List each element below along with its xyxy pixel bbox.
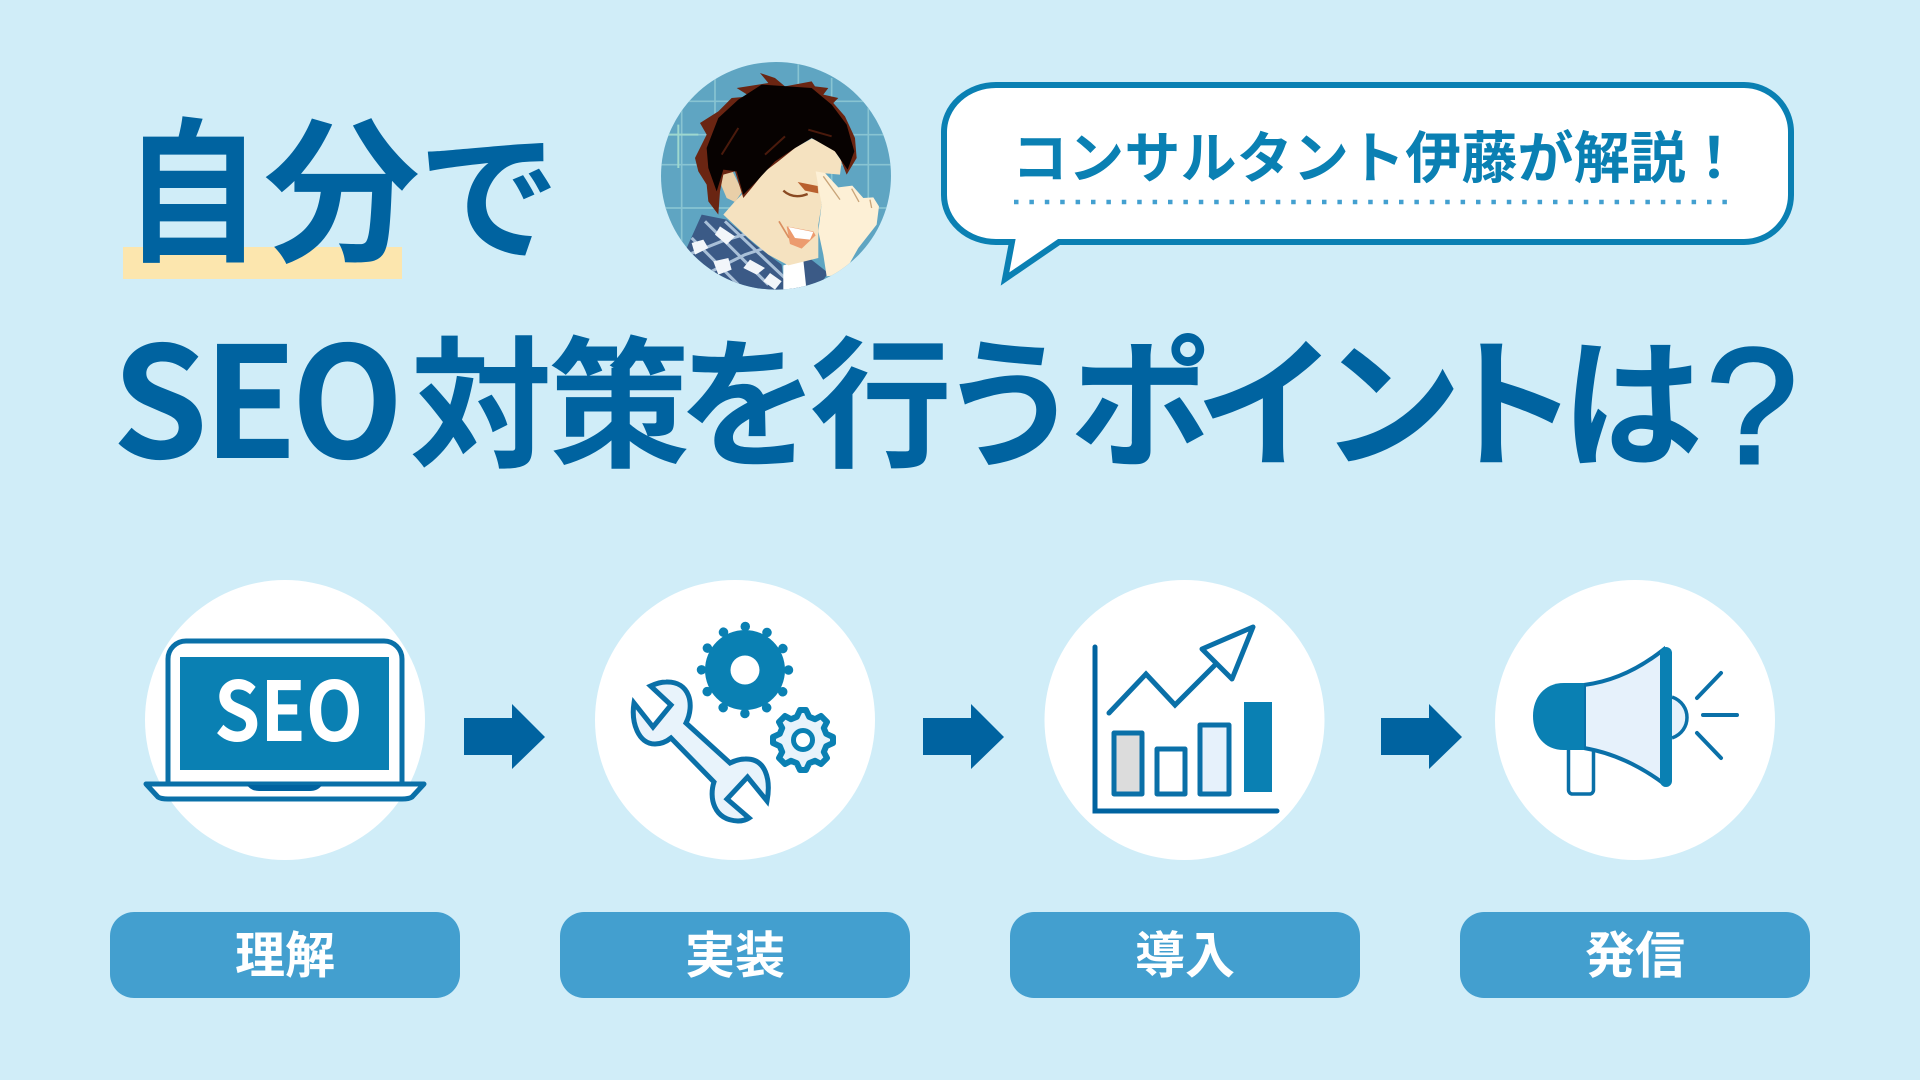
hand (816, 171, 879, 276)
icon: SEO laptop (145, 580, 425, 860)
bubble text: コンサルタント伊藤が解説！ (1012, 114, 1742, 195)
speech bubble (944, 85, 1791, 279)
eyebrow and eye (798, 182, 818, 193)
label: 発信: 発信 (1585, 916, 1685, 988)
title line 2: 対策を行うポイントは (410, 291, 1703, 497)
title line 1 with highlight: で (418, 84, 560, 290)
shirt (687, 215, 785, 291)
icon: megaphone (1495, 580, 1775, 860)
icon: growth chart (1044, 580, 1324, 860)
arrow 3 (1381, 704, 1462, 769)
label: 導入: 導入 (1135, 916, 1235, 988)
title line 2: ? (1706, 314, 1798, 498)
step 2: implementation (560, 580, 910, 998)
label: 導入 (1010, 912, 1360, 998)
title line 2: S (112, 280, 208, 503)
title line 2: E (203, 280, 298, 503)
title line 1 with highlight (123, 68, 560, 294)
title line 2: O (292, 280, 404, 503)
avatar: consultant portrait (655, 58, 895, 293)
step 1: understanding (110, 580, 460, 998)
icon: SEO laptop: SEO (214, 646, 363, 765)
hair (695, 73, 857, 215)
label: 実装: 実装 (685, 916, 785, 988)
icon: gears and wrench (595, 580, 875, 860)
face (723, 139, 842, 265)
arrow 2 (923, 704, 1004, 769)
label: 理解: 理解 (235, 916, 335, 988)
title line 1 with highlight: 自 (123, 68, 262, 294)
dotted underline (1014, 200, 1727, 204)
mouth (787, 226, 816, 249)
arrow 1 (464, 704, 545, 769)
label: 理解 (110, 912, 460, 998)
label: 実装 (560, 912, 910, 998)
title line 1 with highlight: 分 (264, 68, 420, 294)
step 3: introduction (1010, 580, 1360, 998)
step 4: outreach (1460, 580, 1810, 998)
label: 発信 (1460, 912, 1810, 998)
